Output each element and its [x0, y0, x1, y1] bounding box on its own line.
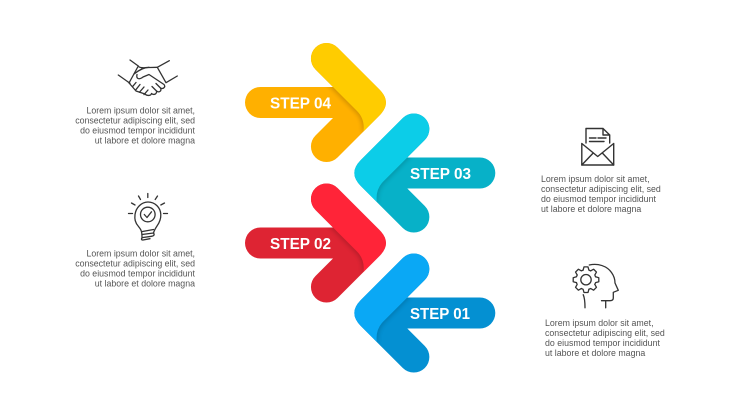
arrow: step 02 [245, 183, 386, 303]
text: light bulb description [75, 248, 196, 288]
text: handshake description: consectetur adipiscing elit, sed [75, 115, 195, 125]
arrow: step 03 [354, 113, 495, 233]
text: envelope description: ut labore et dolore magna [541, 204, 641, 214]
text: head description: do eiusmod tempor incididunt [545, 338, 660, 348]
text: envelope description: consectetur adipiscing elit, sed [541, 184, 661, 194]
arrow: step 01 [354, 253, 495, 373]
text: head description: consectetur adipiscing elit, sed [545, 328, 665, 338]
icon: handshake [118, 60, 177, 95]
text: envelope description: Lorem ipsum dolor sit amet, [541, 174, 650, 184]
icon: light bulb with check [128, 194, 168, 240]
arrow: step 01: STEP 01 [410, 306, 470, 323]
text: envelope description: do eiusmod tempor incididunt [541, 194, 656, 204]
text: envelope description [541, 174, 661, 214]
text: light bulb description: Lorem ipsum dolor sit amet, [86, 248, 195, 258]
text: handshake description: Lorem ipsum dolor sit amet, [86, 105, 195, 115]
text: head description: Lorem ipsum dolor sit amet, [545, 318, 654, 328]
text: head description: ut labore et dolore magna [545, 348, 645, 358]
text: handshake description: do eiusmod tempor incididunt [80, 125, 196, 135]
text: handshake description: ut labore et dolore magna [95, 135, 195, 145]
text: light bulb description: consectetur adipiscing elit, sed [75, 258, 195, 268]
text: light bulb description: ut labore et dolore magna [95, 278, 195, 288]
arrow: step 02: STEP 02 [270, 236, 331, 253]
arrow: step 03: STEP 03 [410, 166, 471, 183]
icon: head with gear [573, 264, 618, 308]
text: handshake description [75, 105, 196, 145]
icon: envelope with letter [582, 128, 614, 165]
arrow: step 04 [245, 43, 386, 162]
arrow: step 04: STEP 04 [270, 96, 331, 112]
text: light bulb description: do eiusmod tempor incididunt [80, 268, 196, 278]
text: head description [545, 318, 665, 358]
